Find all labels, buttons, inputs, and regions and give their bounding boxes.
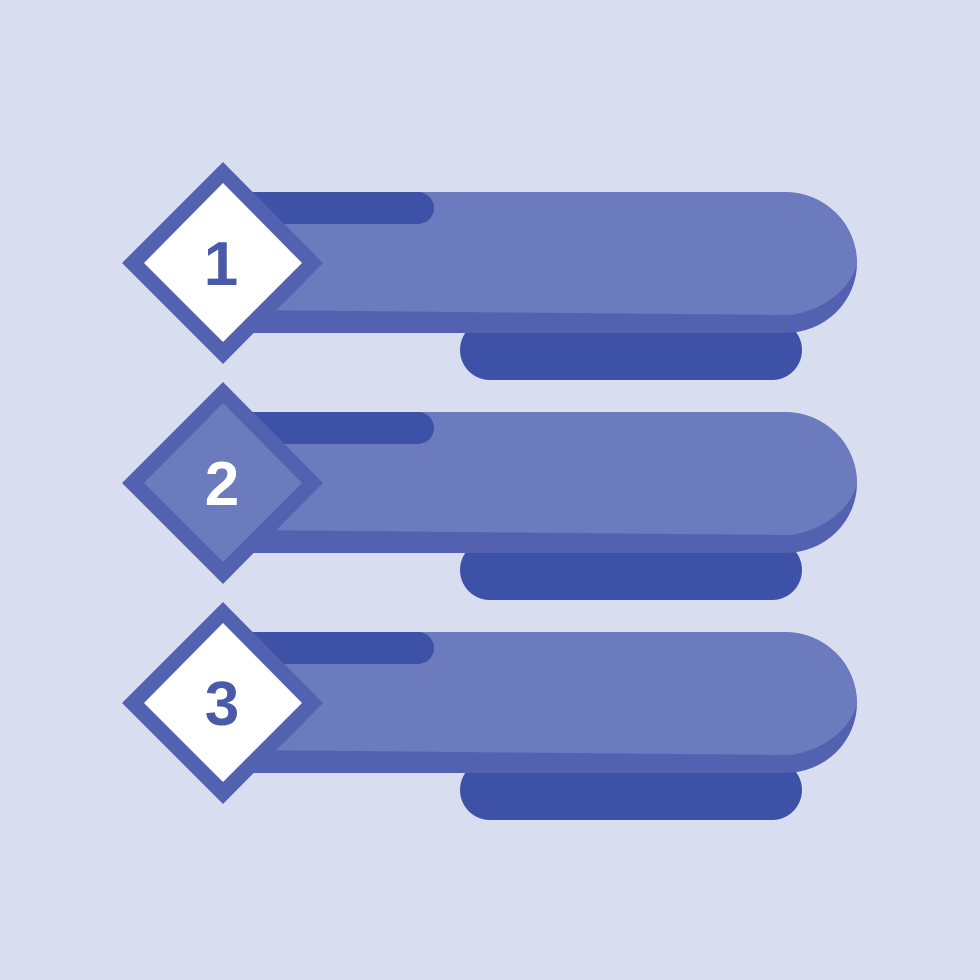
item 2 xyxy=(122,382,857,600)
bar 3 xyxy=(240,632,857,773)
bottom tab 1 xyxy=(460,320,802,380)
bar 2 xyxy=(240,412,857,553)
item 3 xyxy=(122,602,857,820)
diamond badge 2 xyxy=(122,382,323,584)
diamond badge 2: 2 xyxy=(205,450,239,519)
diamond badge 1: 1 xyxy=(204,230,238,299)
diamond badge 3: 3 xyxy=(205,670,239,739)
bottom tab 2 xyxy=(460,540,802,600)
item 1 xyxy=(122,162,857,380)
diamond badge 1 xyxy=(122,162,323,364)
bottom tab 3 xyxy=(460,760,802,820)
bar 1 xyxy=(240,192,857,333)
diamond badge 3 xyxy=(122,602,323,804)
